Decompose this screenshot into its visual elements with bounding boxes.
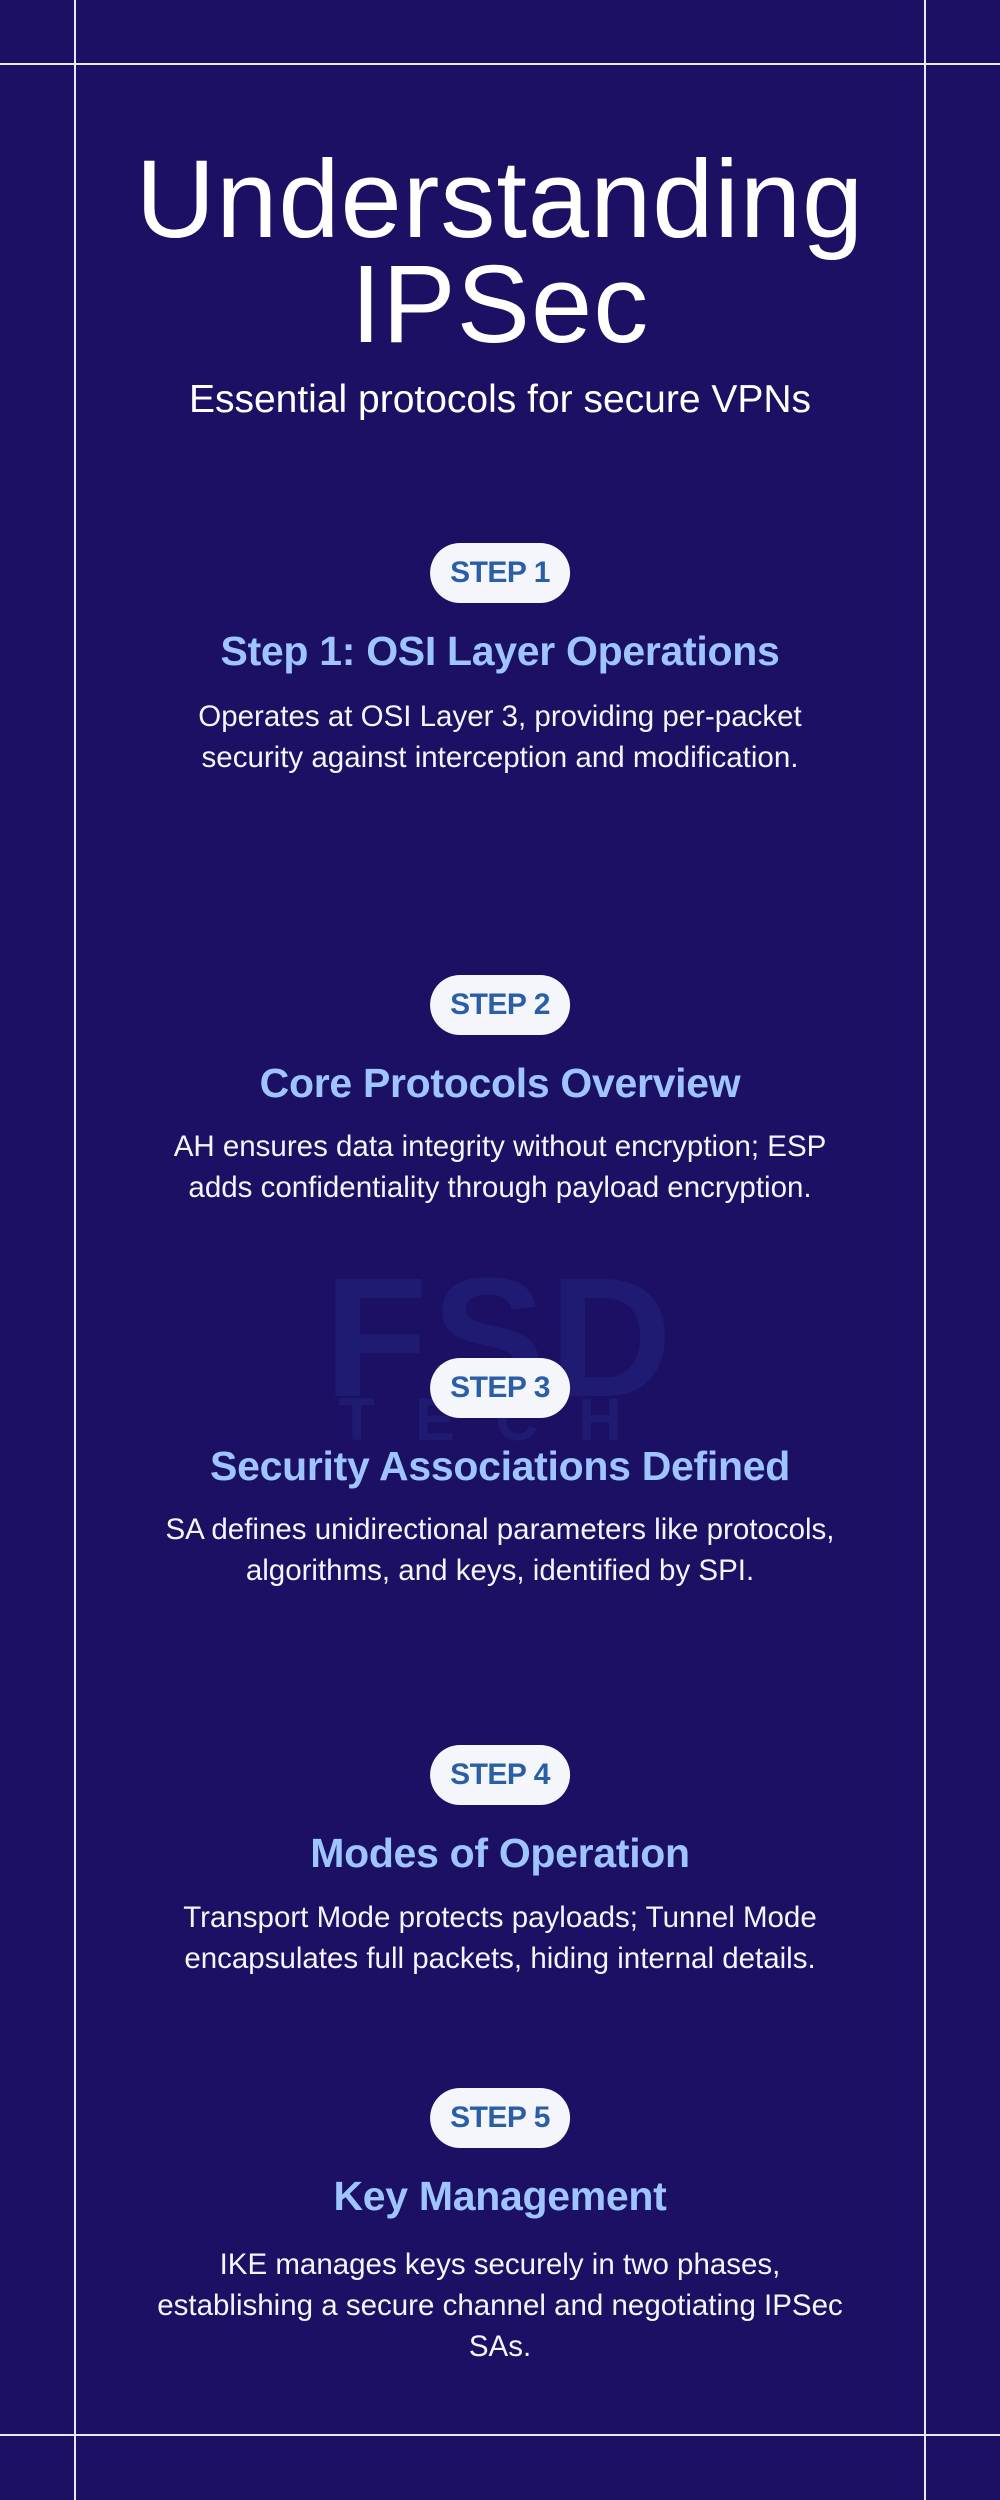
step 5	[157, 2088, 843, 2363]
title	[136, 138, 864, 366]
step 4: encapsulates full packets, hiding internal details.	[184, 1942, 816, 1975]
step 3: STEP 3	[450, 1371, 550, 1404]
step 5: establishing a secure channel and negotiating IPSec	[157, 2289, 843, 2322]
step 3	[165, 1358, 835, 1587]
subtitle: Essential protocols for secure VPNs	[189, 378, 811, 421]
step 3: SA defines unidirectional parameters like protocols,	[165, 1513, 835, 1546]
step 4: STEP 4	[450, 1758, 550, 1791]
step 2	[174, 975, 826, 1204]
step 5: SAs.	[469, 2330, 531, 2363]
step 1: STEP 1	[450, 556, 550, 589]
step 2: AH ensures data integrity without encryption; ESP	[174, 1130, 826, 1163]
watermark: TECH	[338, 1386, 662, 1453]
step 2: STEP 2	[450, 988, 550, 1021]
step 2: Core Protocols Overview	[260, 1060, 740, 1106]
title: IPSec	[351, 243, 649, 366]
step 2: adds confidentiality through payload encryption.	[188, 1171, 812, 1204]
title: Understanding	[136, 138, 864, 261]
step 3: Security Associations Defined	[210, 1443, 790, 1489]
step 4: Transport Mode protects payloads; Tunnel Mode	[183, 1901, 817, 1934]
step 3: algorithms, and keys, identified by SPI.	[246, 1554, 754, 1587]
step 1: Step 1: OSI Layer Operations	[221, 628, 779, 674]
step 1	[198, 543, 802, 774]
step 5: STEP 5	[450, 2101, 550, 2134]
step 4	[183, 1745, 817, 1975]
step 1: Operates at OSI Layer 3, providing per-packet	[198, 700, 802, 733]
step 1: security against interception and modification.	[202, 741, 798, 774]
step 4: Modes of Operation	[310, 1830, 690, 1876]
watermark: FSD	[324, 1243, 676, 1433]
step 5: Key Management	[333, 2173, 666, 2219]
step 5: IKE manages keys securely in two phases,	[220, 2248, 780, 2281]
